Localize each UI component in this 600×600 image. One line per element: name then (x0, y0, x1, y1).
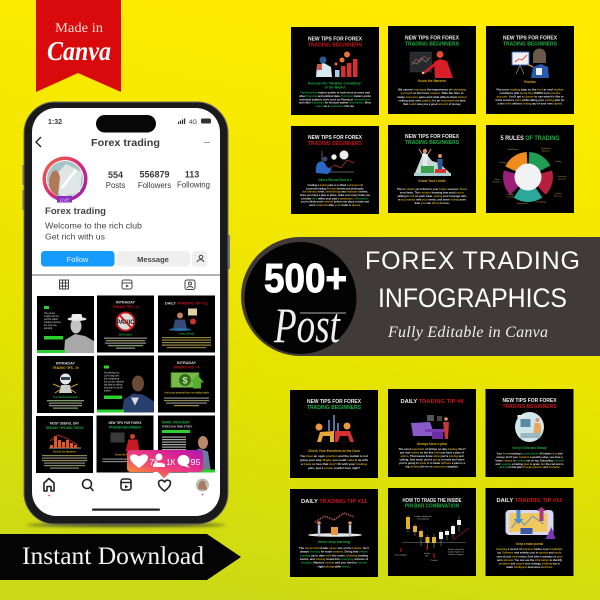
card: inside pin bar combination (388, 488, 476, 576)
post: quote with suited man: Something you (104, 372, 120, 374)
phone mockup (22, 102, 230, 527)
chart annotations: market higher on (448, 550, 465, 554)
nav: reels (121, 479, 131, 490)
card: know the markets (388, 26, 476, 114)
badge: 500+ post (244, 242, 356, 354)
profile bio: Forex trading (45, 206, 106, 217)
nav dots (48, 494, 203, 496)
body text (398, 447, 466, 468)
card: make a plan: TRADING BEGINNERS (308, 141, 363, 147)
body text: books, and staying tuned into emerging schools of (300, 557, 368, 561)
heading: Keep it Slow and Steady (512, 446, 547, 450)
post: quote with suited man: big deal by selling (104, 384, 123, 386)
status bar: 4G (189, 120, 197, 126)
illustration: analyst and bars (316, 52, 358, 77)
nav: home (44, 478, 54, 491)
card: practice: TRADING BEGINNERS (503, 42, 558, 48)
body text (397, 187, 468, 205)
suggest button (192, 251, 208, 266)
card: 5 rules of trading (486, 125, 574, 213)
body text (496, 88, 565, 106)
body text: staying up to date with the news, utilizing trading (300, 553, 368, 557)
post: new tips, red suit: Know the Markets (115, 454, 136, 456)
post grid (36, 296, 215, 473)
profile tabs (32, 274, 220, 290)
card: keep it slow and steady: NEW TIPS FOR FOREX (502, 398, 557, 404)
illustration: plan chart (316, 150, 354, 174)
wheel labels: Capital (507, 193, 514, 196)
heading (365, 247, 580, 313)
post: intraday tip 4, cash: INTRADAY (177, 361, 197, 365)
wheel labels: Open (494, 179, 500, 181)
post: intraday tip 3, panic: TRADING TIPS - #3 (112, 305, 139, 309)
message button: Message (137, 255, 169, 264)
comments: 95 (190, 458, 201, 467)
more dots: ... (204, 138, 210, 145)
avatar: LIVE (60, 198, 69, 202)
card: keep it slow and steady: TRADING BEGINNERS (502, 404, 557, 410)
chart annotations: bull the support (449, 553, 464, 556)
follow button: Follow (67, 255, 89, 264)
body text: that could save you a good amount of money. (403, 102, 461, 106)
heading: Forecast the "Weather Conditions" (308, 82, 362, 86)
wheel labels: Capital (555, 192, 562, 195)
body text: in accordance with your needs, and never risking more (398, 198, 466, 202)
post: useful day trading tips: TRADING TIPS AND TRICKS (46, 426, 84, 430)
body text: most irrational after your trade is placed. (309, 203, 361, 207)
post: quote with hat man: market practices (44, 321, 62, 324)
candlestick chart (401, 515, 469, 558)
wheel labels (493, 147, 567, 205)
illustration: red suit and chart (410, 51, 453, 78)
subheading: Fully Editable in Canva (387, 324, 548, 341)
body text: always looking for trade smarter. Doing that means (300, 550, 368, 554)
profile stats: Following (177, 180, 210, 190)
card: know your limits (388, 125, 476, 213)
badge: 500+ post: Post (273, 297, 341, 353)
chart annotations: Traders looking for (414, 515, 432, 518)
post: intraday tip 9, robot: TRADING TIPS - #9 (52, 366, 79, 370)
profile stats: Posts (106, 181, 125, 190)
post: intraday tip 9, robot: Use Technical Guide (53, 396, 78, 399)
body text: technical analysis tools such as Fibonacci retracements (300, 97, 371, 101)
card: forecast the market: NEW TIPS FOR FOREX (308, 36, 363, 42)
heading: Keep a trade journal (516, 542, 543, 546)
card: daily tip 8 (388, 389, 476, 477)
body text: big blowing fire for an expensive slaughter. (406, 464, 459, 468)
post: daily tip 12: DAILY TRADING TIP #12 (165, 302, 208, 306)
wheel labels: Emotional (541, 147, 551, 150)
body text: problems and expand your strategy, enabling you to (499, 562, 560, 566)
post: useful day trading tips: Set Out the Numbers (53, 450, 77, 454)
message button (117, 251, 190, 266)
post: new tips, red suit: TRADING BEGINNERS (108, 426, 142, 430)
body text: Fundamental traders prefer to look more at news and (300, 90, 370, 94)
post: intraday tip 3, panic: PANIC (116, 319, 135, 326)
heading: Practice (524, 80, 536, 84)
post: quote with suited man (97, 356, 154, 412)
profile stats: 556879 (139, 170, 170, 180)
wheel labels: Growth (506, 196, 514, 198)
body text: and outcome. You can use the information to identify (497, 558, 562, 562)
wheel labels: Vitality (555, 160, 562, 163)
post: daily tip 12 (158, 296, 215, 352)
card: forecast the market: TRADING BEGINNERS (308, 42, 363, 48)
body text: Keeping a record of previous trades is an invaluable (496, 547, 563, 551)
card: make a plan: NEW TIPS FOR FOREX (308, 135, 363, 141)
wheel labels: Business (493, 182, 502, 184)
post: quote with hat man: The purest (44, 312, 55, 315)
nav: heart (158, 480, 170, 491)
profile bio: Get rich with us (45, 232, 105, 242)
profile bio: Welcome to the rich club (45, 222, 143, 230)
card: daily tip 11 (290, 489, 378, 577)
profile title: Forex trading (91, 137, 160, 149)
card: inside pin bar combination: PIN BAR COMBINATION (405, 504, 459, 510)
body text: your limits. This includes knowing how much you're (400, 190, 464, 194)
body text: conditions with a risk-free FOREX.com practice (500, 91, 561, 95)
body text: The successful trader never sits on his laurels. He's (299, 546, 369, 550)
profile bio (45, 206, 143, 242)
instant download arrow: Instant Download (22, 543, 204, 570)
post: avoid crooks: FOREX DAY RISK STUDY (162, 426, 192, 428)
wheel labels: Healthcare (508, 148, 519, 151)
body text (299, 90, 372, 108)
card: daily tip 8: DAILY TRADING TIP #8 (400, 399, 464, 405)
card: practice: NEW TIPS FOR FOREX (503, 36, 558, 42)
wheel labels: Success (554, 196, 563, 198)
dynamic island (96, 115, 156, 132)
body text: We cannot overstate the importance of educating (398, 88, 466, 92)
heading: of the Market (324, 86, 346, 90)
wheel labels: Energy (500, 161, 507, 164)
body text: study currency pairs and what affects them before (397, 95, 467, 99)
post: quote with suited man: trades (104, 390, 111, 392)
body text: a trade or two that don't fit with your trading (301, 462, 367, 466)
illustration: trader at screens (515, 412, 544, 442)
body text: selling, how much you're going to trade and when (400, 458, 465, 462)
post: useful day trading tips: MOST USEFUL DAY (50, 422, 80, 426)
post: quote with suited man: but you are rational (104, 380, 124, 384)
body text: going your way. Maybe you could make it up with (300, 458, 368, 462)
chart annotations: Key Support (395, 554, 407, 556)
chart annotations (395, 515, 465, 562)
post: new tips, red suit: NEW TIPS FOR FOREX (108, 421, 142, 425)
post: intraday tip 4, cash: Limit your potential loss on trading deals (164, 392, 210, 394)
post: avoid crooks (158, 416, 215, 472)
title: 5 RULES OF TRADING (500, 135, 560, 142)
card: inside pin bar combination: HOW TO TRADE THE INSIDE (402, 498, 462, 504)
body text: money, but if your numbers a positive edge, you have a (496, 455, 563, 459)
body text (496, 547, 563, 569)
wheel labels: Competitors (516, 202, 529, 205)
card: forecast the market (291, 27, 379, 115)
body text: right along with them. (318, 564, 351, 568)
card: know your limits: TRADING BEGINNERS (405, 140, 460, 146)
body text: willing to risk on each trade, setting your leverage ratio (397, 194, 467, 198)
chart annotations: Inside (424, 553, 431, 555)
body text: a test drive without risking any of your own capital. (498, 102, 563, 106)
bottom navigation (44, 478, 209, 511)
card: know the markets: NEW TIPS FOR FOREX (405, 36, 460, 42)
body text (299, 546, 369, 568)
ribbon: Made in Canva: Made in (55, 20, 103, 35)
post: quote with hat man: learning (44, 327, 53, 330)
ribbon: Made in Canva (36, 0, 121, 92)
phone screen (32, 108, 220, 516)
body text: and other indicators for forecast market movements. Most (299, 100, 371, 104)
chart annotations: Bar (425, 554, 429, 558)
card: check your emotions: NEW TIPS FOR FOREX (307, 399, 362, 405)
card: daily tip 16 (486, 488, 574, 576)
body text: Once you have a plan in place, make sure every trade you (300, 193, 370, 197)
card: check your emotions: TRADING BEGINNERS (307, 405, 362, 411)
nav: search (82, 480, 93, 490)
back arrow (36, 137, 41, 147)
profile stats: 113 (185, 170, 199, 180)
post: new tips, red suit (96, 416, 154, 472)
body text: trade currency pairs while taking your trading plan for (496, 98, 565, 102)
heading: Make a Plan and Stick to it (318, 178, 352, 182)
body text: put real money on the line until you have a plan of (400, 450, 464, 454)
post: useful day trading tips (36, 416, 93, 473)
instant download arrow (0, 534, 241, 580)
ribbon: Made in Canva: Canva (47, 36, 111, 66)
body text: than you can afford to lose. (414, 201, 450, 205)
home indicator (92, 508, 160, 511)
heading: INFOGRAPHICS (378, 283, 567, 313)
body text (496, 452, 564, 469)
body text: other financial and political data. Technical traders prefer (299, 94, 372, 98)
heading: Know Your Limits (418, 179, 446, 183)
body text: and creating a trading plan is great, but the real test is (496, 462, 564, 466)
card: know the markets: TRADING BEGINNERS (405, 42, 460, 48)
post: intraday tip 4, cash: $ (182, 376, 188, 386)
body text: yourself on the forex market. Take the time to (400, 91, 464, 95)
body text: action. That means know what you're buying and (400, 454, 464, 458)
heading: Know the Markets (418, 79, 446, 83)
illustration: planning desk (411, 415, 449, 439)
illustration: journal screen (506, 507, 556, 539)
post: intraday tip 3, panic (97, 296, 154, 352)
card: know your limits: NEW TIPS FOR FOREX (405, 134, 460, 140)
post: quote with suited man: from beginning (104, 378, 120, 380)
avatar (42, 156, 88, 202)
wheel labels: Financial (558, 176, 567, 178)
title banner (241, 237, 600, 356)
body text: The most important of all tips on day trading. Don't (398, 447, 466, 451)
body text: Creating a trading plan is a critical component of (308, 183, 362, 187)
post: intraday tip 3, panic: INTRADAY (116, 300, 136, 304)
chart annotations: a breakdown (417, 518, 430, 520)
body text: store all your trade history. Even write a summary on price (496, 554, 563, 558)
chart annotations: Buyers drive the (448, 548, 465, 551)
post: quote with hat man (37, 296, 94, 353)
post: quote with hat man: world's oldest (44, 318, 58, 321)
wheel labels: Balance (542, 150, 551, 152)
body text: plan...just a couple couldn't hurt, right? (308, 466, 360, 470)
profile stats: Followers (138, 181, 171, 190)
body text: traders use a combination of the two. (316, 104, 355, 108)
engagement bubble (127, 450, 203, 478)
followers: 1K (166, 458, 176, 467)
badge: 500+ post: 500+ (264, 255, 347, 301)
body text: better chance of coming out on top. Educating yourself (496, 458, 564, 462)
body text: Your loss in trading is unavoidable. All traders lose bad (496, 452, 563, 456)
card: keep it slow and steady (486, 389, 574, 477)
follow button (41, 251, 114, 266)
post: daily tip 12: Learn to Read (179, 332, 195, 336)
card: daily tip 11: DAILY TRADING TIP #11 (301, 499, 367, 505)
post: quote with hat man: insight into the (44, 315, 60, 318)
post: quote with suited man: long term in you're (104, 386, 124, 390)
body text: account. You'll get a chance to see what it's like to (496, 94, 564, 98)
body text: consider falls within your plan's parameters. Remember: (301, 196, 369, 200)
post: quote with suited man: Love long term (104, 374, 119, 378)
wheel labels: Knowledge (536, 202, 547, 204)
post: intraday tip 4, cash (158, 356, 215, 412)
card: practice (486, 26, 574, 114)
post: quote with hat man: the only way (44, 324, 58, 327)
illustration: bull and bear (316, 415, 354, 442)
post: intraday tip 4, cash: TRADING TIPS - #4 (174, 366, 200, 370)
body text: risk tolerance level, methodology and evaluation criteria. (302, 190, 368, 194)
profile stats (106, 170, 210, 190)
post: intraday tip 3, panic: Don't panic (119, 334, 133, 336)
body text: successful trading. It should include your profit goals, (306, 186, 364, 190)
profile stats: 554 (108, 170, 123, 180)
body text: This is simple yet critical to your future success: Know (397, 187, 468, 191)
body text: You have an open position and the market is not (300, 454, 368, 458)
body text: Put your trading plan to the test in real market (496, 88, 564, 92)
body text (300, 454, 368, 470)
illustration: person and chart board (512, 49, 549, 78)
body text (397, 88, 467, 106)
status bar: 1:32 (48, 119, 62, 126)
post: intraday tip 9, robot (37, 356, 94, 413)
card: check your emotions (290, 390, 378, 478)
status bar (48, 118, 211, 126)
heading: Check Your Emotions at the Door (308, 449, 361, 453)
likes: 7K (150, 458, 160, 467)
body text: you're likely most rational before you place a trade and (301, 200, 369, 204)
post: intraday tip 9, robot: INTRADAY (56, 362, 76, 366)
card: daily tip 16: DAILY TRADING TIP #16 (496, 498, 563, 504)
body text: you're going to trade it. A trader without a plan is a (399, 461, 465, 465)
body text: tip. Software now enables you to quickly and easily (498, 551, 562, 555)
body text (300, 183, 370, 207)
chart annotations: Pin Bar (430, 559, 438, 562)
heading: Never stop learning (318, 540, 350, 544)
heading: Always have a plan (417, 442, 447, 446)
body text: sticking to that plan through patience and discipline. (498, 465, 561, 469)
card: make a plan (291, 126, 379, 214)
wheel labels: Success (558, 178, 567, 180)
illustration: two people on podiums (414, 149, 451, 176)
heading (308, 82, 362, 90)
body text: thought. Markets evolve and you need to evolve (301, 561, 367, 565)
illustration: traders and charts (308, 513, 362, 537)
body text: make intelligent decisions in future. (506, 565, 553, 569)
body text: risking your own capital. It's an investment in time (398, 98, 466, 102)
post: avoid crooks: MARK CROOKER (162, 420, 190, 424)
nav: profile avatar (196, 478, 209, 492)
wheel chart (503, 152, 553, 202)
heading: FOREX TRADING (365, 247, 580, 275)
